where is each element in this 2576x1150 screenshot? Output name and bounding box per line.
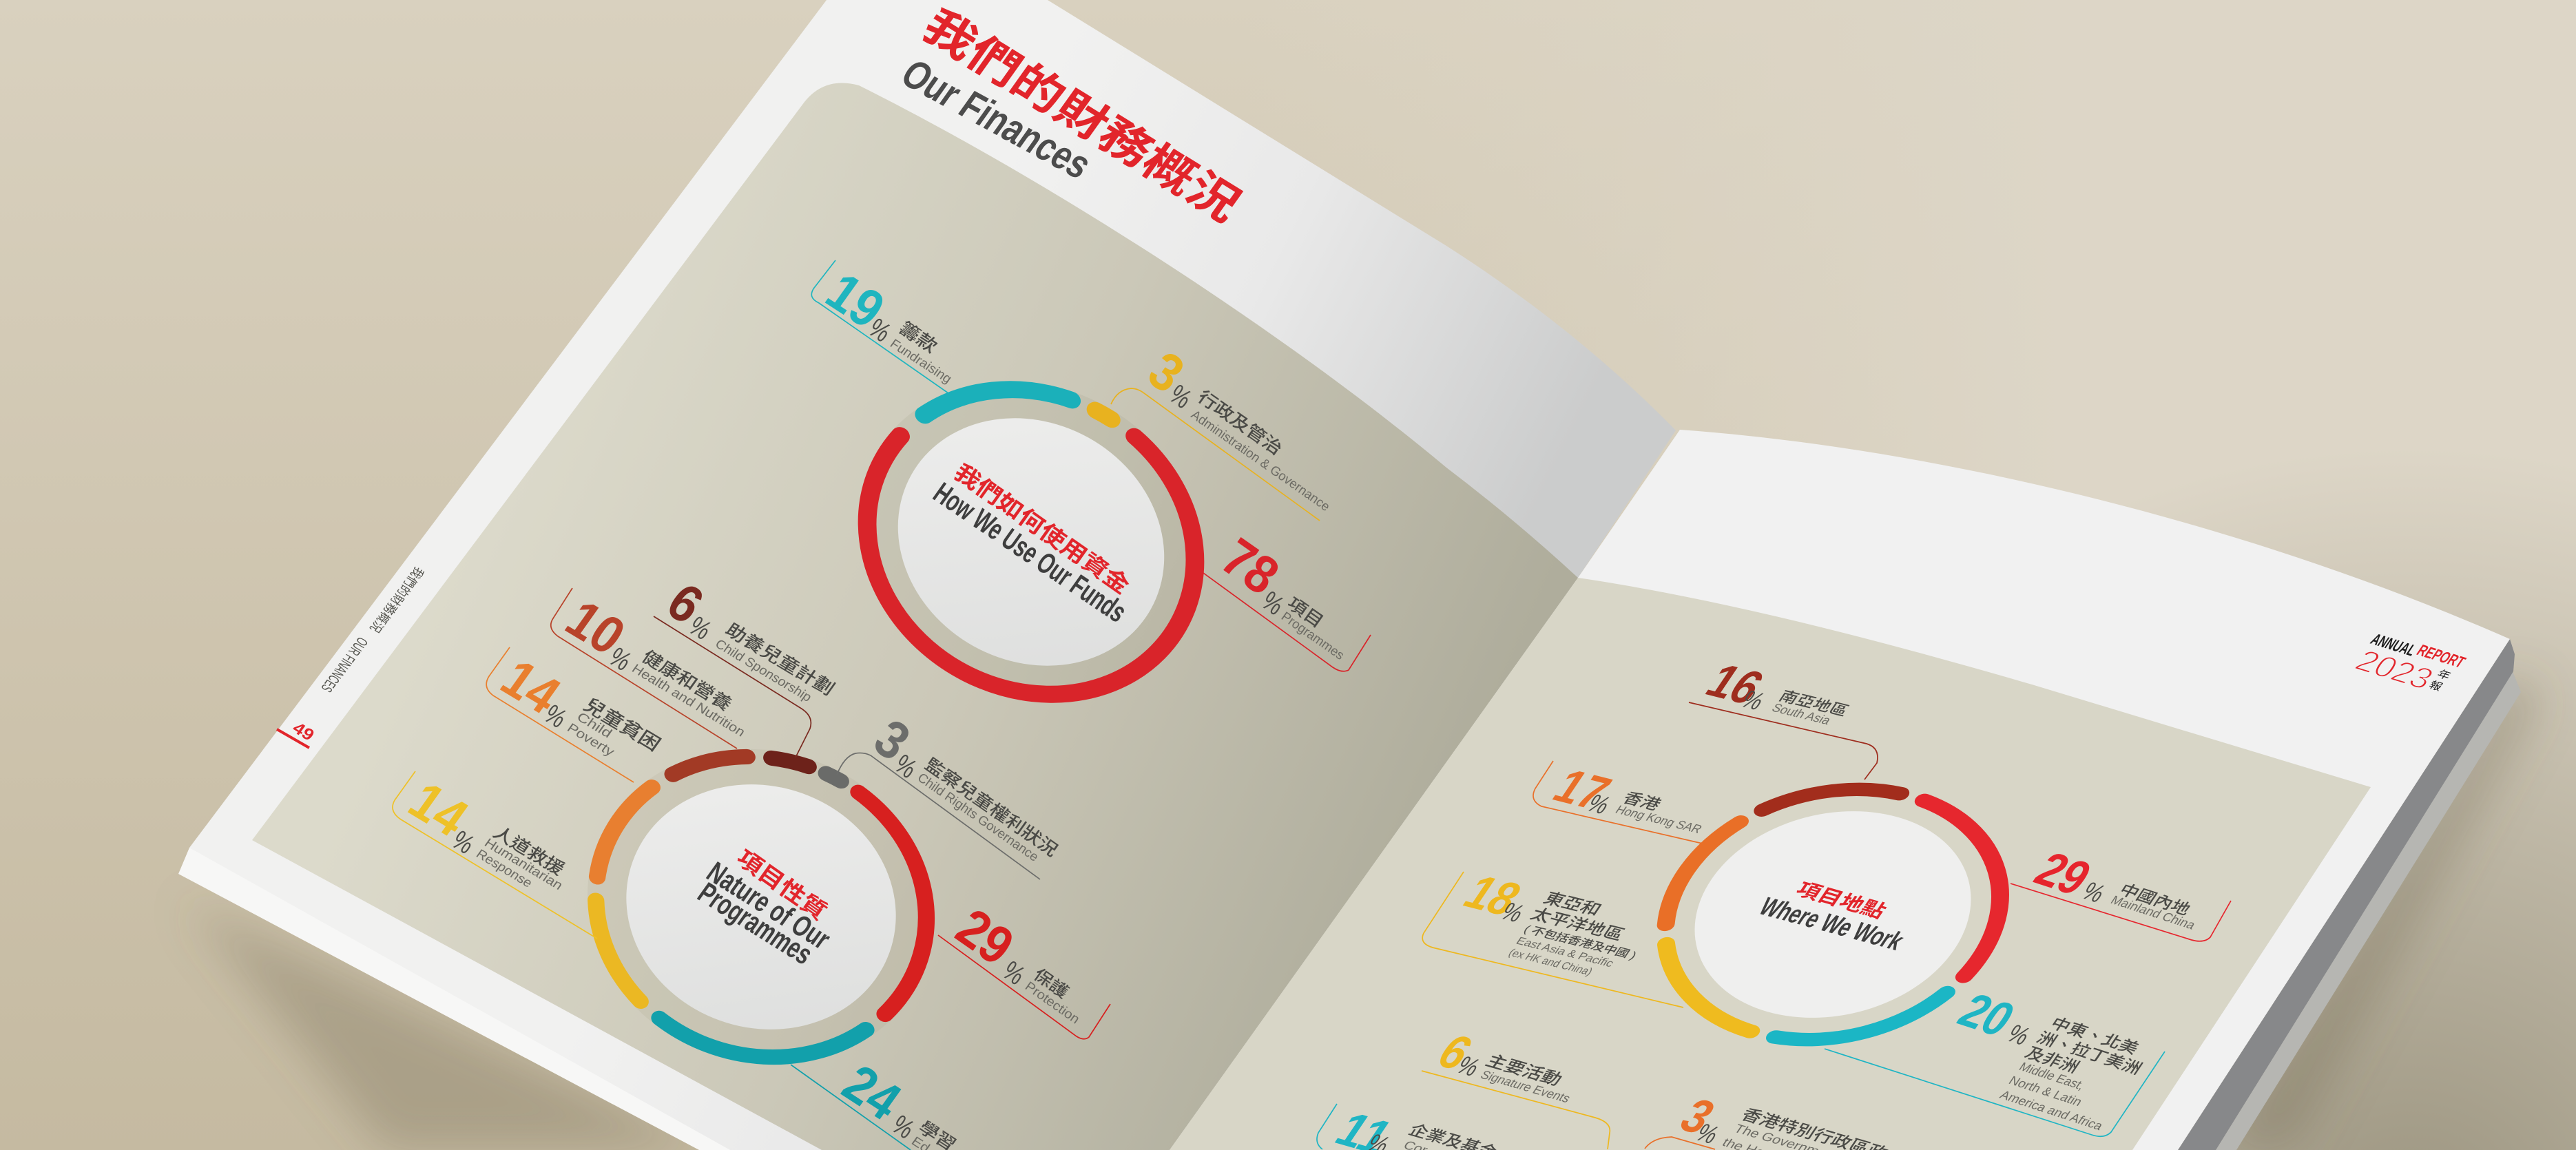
donut title: nature of our programmes: Programmes	[692, 876, 819, 970]
label: 18% east asia and pacific: 東亞和	[1540, 889, 1605, 919]
label: 18% east asia and pacific	[1422, 866, 1683, 1007]
label: 3% administration and governance: 行政及管治	[1194, 387, 1286, 459]
label: 3% child rights governance: %	[889, 749, 922, 784]
label: 78% programmes: %	[1256, 585, 1289, 621]
label: 29% mainland china: 中國內地	[2116, 881, 2194, 919]
donut title: how we use our funds: 我們如何使用資金	[950, 459, 1134, 599]
label: 18% east asia and pacific: 18	[1454, 866, 1532, 926]
label: 16% south asia	[1689, 654, 1878, 780]
label: 78% programmes: 項目	[1284, 594, 1327, 631]
label: 14% child poverty	[486, 647, 664, 782]
label: 14% humanitarian response: %	[446, 825, 480, 860]
label: 3% child rights governance: 監察兒童權利狀況	[922, 755, 1061, 860]
label: 20% middle east, north and latin america and africa: 中東、北美	[2047, 1014, 2142, 1058]
label: 29% protection: 29	[946, 897, 1025, 976]
annual report logo: 報	[2427, 679, 2445, 693]
label: 18% east asia and pacific: %	[1495, 897, 1530, 927]
label: 20% middle east, north and latin america and africa: America and Africa	[1997, 1088, 2106, 1133]
title: 我們的財務概況	[914, 0, 1250, 231]
donut chart: nature of our programmes	[454, 623, 1068, 1150]
label: 17% hong kong sar: %	[1581, 789, 1617, 819]
label: 20% middle east, north and latin america and africa: %	[2002, 1019, 2036, 1050]
label: 3% the government of the hong kong sar	[1645, 1089, 1891, 1150]
label: 6% signature events: Signature Events	[1477, 1068, 1573, 1105]
label: 20% middle east, north and latin america and africa: 及非洲	[2022, 1044, 2083, 1076]
donut title: nature of our programmes: 項目性質	[732, 845, 831, 925]
label: 6% child sponsorship: %	[683, 611, 717, 646]
label: 14% child poverty: %	[539, 699, 572, 734]
label: 17% hong kong sar	[1533, 760, 1705, 844]
donut title: where we work: 項目地點	[1791, 879, 1891, 922]
label: 3% administration and governance: Administration & Governance	[1188, 408, 1332, 514]
donut chart: where we work	[1515, 691, 2150, 1138]
label: 3% administration and governance	[1111, 339, 1332, 521]
annual report logo	[2349, 630, 2469, 696]
title: Our Finances	[893, 51, 1100, 187]
label: 14% humanitarian response	[393, 771, 597, 939]
label: 18% east asia and pacific: ( 不包括香港及中國 )	[1521, 923, 1639, 961]
label: 3% child rights governance	[837, 707, 1061, 879]
label: 20% middle east, north and latin america and africa: Middle East,	[2016, 1060, 2088, 1093]
annual report logo: 年	[2435, 668, 2453, 682]
label: 6% signature events	[1422, 1025, 1610, 1149]
lower sheets of the left page	[178, 848, 778, 1150]
label: 20% middle east, north and latin america and africa: 洲、拉丁美洲	[2033, 1029, 2146, 1078]
donut chart: how we use our funds	[747, 272, 1315, 812]
label: 19% fundraising: 19	[816, 261, 895, 339]
label: 29% protection: %	[997, 955, 1030, 991]
label: 10% health and nutrition: Health and Nutrition	[629, 662, 747, 740]
label: 19% fundraising: 籌款	[895, 318, 941, 357]
annual report logo: REPORT	[2413, 641, 2469, 671]
label: 19% fundraising: %	[863, 313, 896, 348]
label: 78% programmes	[1203, 526, 1371, 671]
label: 3% child rights governance: Child Rights Governance	[915, 771, 1041, 864]
label: 14% humanitarian response: 人道救援	[490, 823, 568, 879]
label: 20% middle east, north and latin america and africa: 20	[1949, 983, 2025, 1046]
label: 6% signature events: 6	[1428, 1025, 1483, 1080]
label: 6% child sponsorship: 6	[656, 572, 714, 635]
panel: left page background	[252, 83, 1578, 1150]
label: 18% east asia and pacific: (ex HK and China)	[1506, 946, 1595, 978]
label: 14% humanitarian response: 14	[398, 771, 479, 848]
label: 14% humanitarian response: Humanitarian	[481, 836, 565, 893]
label: 29% mainland china: Mainland China	[2108, 893, 2198, 932]
label: 78% programmes: Programmes	[1278, 609, 1347, 663]
donut title: how we use our funds: How We Use Our Funds	[928, 476, 1133, 629]
running footer with page number	[277, 565, 427, 748]
annual report logo: ANNUAL	[2367, 630, 2420, 659]
label: 17% hong kong sar: Hong Kong SAR	[1612, 803, 1705, 836]
label: 3% the government of the hong kong sar: 3	[1670, 1089, 1725, 1144]
label: 16% south asia: %	[1736, 685, 1771, 715]
label: 78% programmes: 78	[1211, 526, 1290, 606]
running footer with page number: OUR FINANCES	[318, 634, 371, 695]
label: 6% child sponsorship	[654, 572, 838, 757]
label: 10% health and nutrition: 10	[555, 589, 636, 666]
label: 10% health and nutrition	[551, 588, 747, 749]
label: 16% south asia: 16	[1696, 654, 1774, 714]
label: 16% south asia: South Asia	[1769, 701, 1834, 727]
running footer with page number: 我們的財務概況	[367, 565, 427, 635]
label: 18% east asia and pacific: East Asia & Pacific	[1514, 934, 1617, 970]
label: 29% protection	[938, 897, 1110, 1039]
donut title: where we work	[1754, 879, 1910, 956]
label: 14% child poverty: 兒童貧困	[579, 695, 664, 755]
label: 19% fundraising	[811, 260, 954, 393]
label: 20% middle east, north and latin america and africa	[1825, 983, 2165, 1136]
label: 14% humanitarian response: Response	[473, 847, 534, 890]
donut title: where we work: Where We Work	[1754, 892, 1910, 956]
donut title: nature of our programmes	[692, 845, 837, 970]
label: 16% south asia: 南亞地區	[1776, 688, 1852, 720]
label: 20% middle east, north and latin america and africa: North & Latin	[2006, 1074, 2085, 1109]
label: 29% mainland china: %	[2077, 877, 2111, 908]
left page	[189, 0, 1676, 1150]
label: 3% administration and governance: %	[1164, 379, 1197, 415]
label: 6% child sponsorship: Child Sponsorship	[712, 637, 814, 704]
label: 10% health and nutrition: %	[603, 642, 637, 677]
label: 29% protection: 保護	[1030, 965, 1072, 1002]
label: 29% mainland china	[2011, 842, 2231, 941]
label: 6% signature events: %	[1451, 1051, 1486, 1081]
donut title: nature of our programmes: Nature of Our	[701, 855, 837, 955]
label: 18% east asia and pacific: 太平洋地區	[1527, 905, 1628, 943]
label: 6% signature events: 主要活動	[1482, 1052, 1566, 1089]
annual report logo: 2023	[2349, 645, 2440, 696]
running footer with page number: 49	[289, 719, 318, 744]
label: 3% administration and governance: 3	[1138, 339, 1195, 404]
label: 14% child poverty: Poverty	[564, 721, 617, 760]
label: 6% child sponsorship: 助養兒童計劃	[722, 620, 838, 699]
right page	[1170, 430, 2510, 1150]
label: 29% mainland china: 29	[2025, 842, 2101, 905]
label: 10% health and nutrition: 健康和營養	[638, 647, 736, 714]
label: 11% corporate and foundation	[1317, 1102, 1501, 1150]
label: 24% education: 24	[832, 1053, 912, 1131]
label: 14% child poverty: Child	[574, 710, 614, 741]
panel: right page background	[1170, 578, 2371, 1150]
label: 17% hong kong sar: 17	[1544, 760, 1621, 819]
label: 24% education: %	[886, 1109, 920, 1145]
page block edge, right side	[2178, 639, 2521, 1150]
label: 17% hong kong sar: 香港	[1619, 789, 1664, 813]
label: 19% fundraising: Fundraising	[887, 337, 954, 386]
label: 29% protection: Protection	[1022, 979, 1082, 1027]
book shadow	[186, 675, 2542, 1150]
label: 3% child rights governance: 3	[864, 707, 921, 772]
label: 14% child poverty: 14	[490, 648, 572, 725]
label: 24% education	[791, 1053, 959, 1150]
